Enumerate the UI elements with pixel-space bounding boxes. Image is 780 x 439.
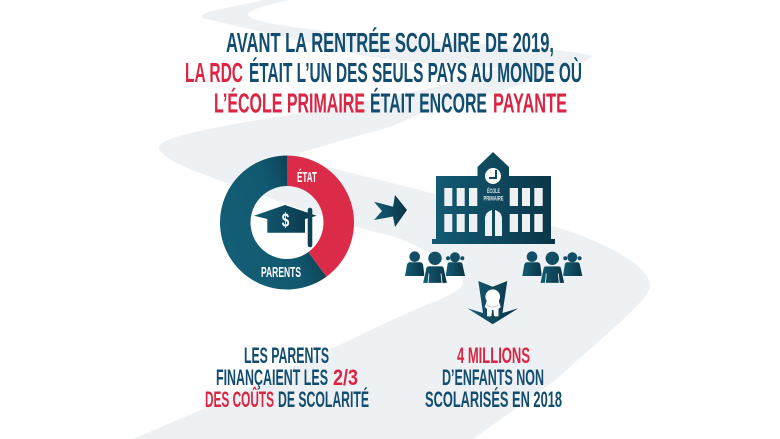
text: out-of-school children — [425, 343, 562, 412]
donut chart: funding share — [220, 156, 354, 289]
arrow: right — [374, 195, 407, 227]
icon: school building: PRIMAIRE — [484, 196, 504, 202]
segment: parents — [220, 156, 326, 289]
text: parents funding: LES PARENTS — [244, 343, 329, 368]
title: L’ÉCOLE PRIMAIRE — [214, 88, 365, 118]
title — [185, 27, 582, 118]
seated child — [485, 289, 500, 304]
school sign: ÉCOLE — [487, 187, 500, 195]
label: parents: PARENTS — [261, 264, 301, 281]
label: état: ÉTAT — [297, 169, 317, 186]
text: parents funding: DE SCOLARITÉ — [278, 387, 369, 412]
title: AVANT LA RENTRÉE SCOLAIRE DE 2019, — [226, 27, 554, 58]
icon: children left group — [405, 251, 465, 283]
title: PAYANTE — [493, 88, 567, 118]
icon: down arrow with sad child — [467, 281, 518, 324]
icon: children right group — [522, 251, 582, 283]
text: out-of-school children: D’ENFANTS NON — [442, 365, 544, 390]
icon: school building — [432, 152, 555, 244]
text: parents funding: DES COÛTS — [205, 387, 274, 412]
icon: graduation cap with dollar: $ — [282, 210, 290, 232]
door — [485, 210, 502, 236]
clock — [485, 168, 501, 184]
text: out-of-school children: 4 MILLIONS — [457, 343, 530, 368]
text: out-of-school children: SCOLARISÉS EN 2018 — [425, 387, 562, 412]
winding road background — [133, 0, 650, 439]
title: LA RDC — [185, 57, 243, 88]
title: ÉTAIT ENCORE — [370, 88, 487, 118]
segment: état — [287, 156, 354, 277]
text: parents funding: 2/3 — [333, 365, 358, 390]
windows — [444, 188, 543, 232]
text: parents funding — [205, 343, 369, 412]
text: parents funding: FINANÇAIENT LES — [216, 365, 328, 390]
